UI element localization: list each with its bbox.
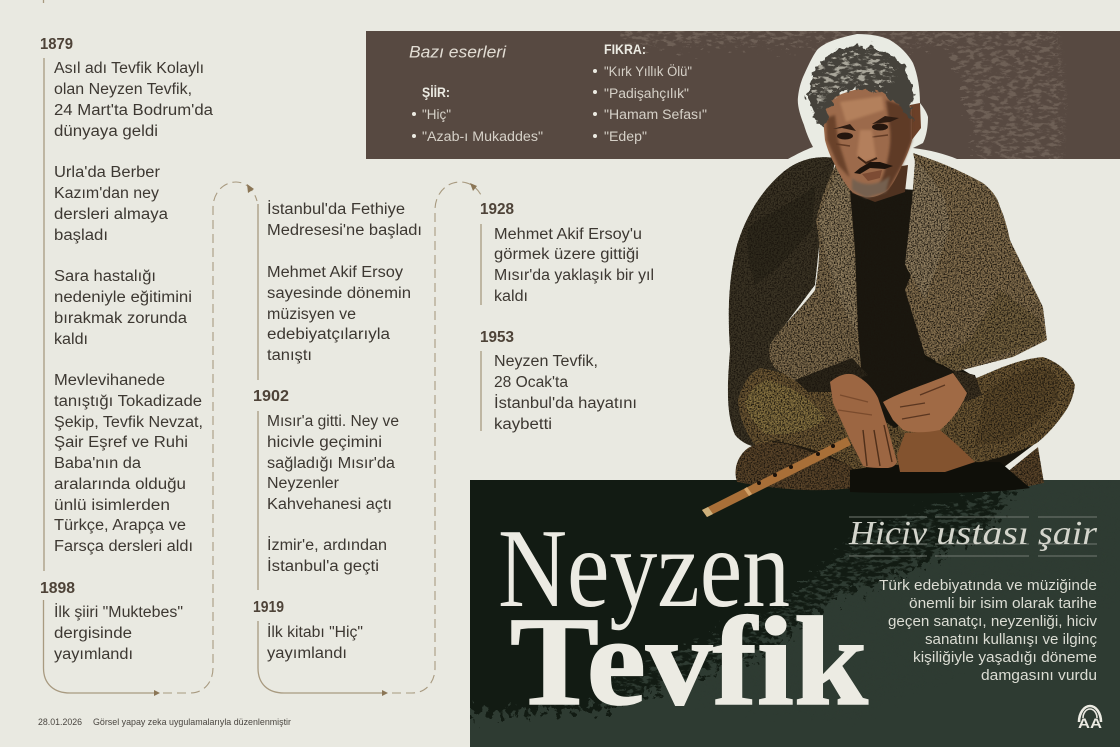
1879 entries: Şair Eşref ve Ruhi bbox=[54, 434, 188, 451]
description text bbox=[879, 578, 1098, 684]
1902 entry: 1902 bbox=[253, 388, 289, 405]
arrow: column 2 to column 3 bbox=[382, 182, 482, 696]
1898 entry bbox=[40, 580, 183, 693]
portrait sticker halo bbox=[788, 34, 957, 159]
subtitle: Hiciv bbox=[848, 515, 928, 552]
timeline column 3 bbox=[480, 201, 654, 433]
1879 entries: olan Neyzen Tevfik, bbox=[54, 81, 192, 98]
1919 entry: İlk kitabı "Hiç" bbox=[267, 623, 363, 641]
1879 entries: 24 Mart'ta Bodrum'da bbox=[54, 102, 213, 119]
face bbox=[822, 87, 912, 197]
1898 entry: İlk şiiri "Muktebes" bbox=[54, 603, 183, 621]
AA logo bbox=[1078, 706, 1102, 731]
1879 entries: Baba'nın da bbox=[54, 455, 141, 472]
anecdote list: "Padişahçılık" bbox=[604, 86, 689, 101]
hair bbox=[808, 46, 913, 128]
footer: date and note: Görsel yapay zeka uygulamalarıyla düzenlenmiştir bbox=[93, 717, 291, 728]
1879 entries: Kazım'dan ney bbox=[54, 185, 159, 202]
1879 entries: Urla'da Berber bbox=[54, 164, 160, 181]
description text: önemli bir isim olarak tarihe bbox=[909, 596, 1097, 612]
poetry list bbox=[412, 85, 543, 144]
1928 entry: 1928 bbox=[480, 201, 514, 218]
1879 entries: Sara hastalığı bbox=[54, 268, 156, 285]
1898 entry: 1898 bbox=[40, 580, 75, 597]
footer: date and note: 28.01.2026 bbox=[38, 717, 82, 728]
1879 entries: ünlü isimlerden bbox=[54, 497, 170, 514]
1953 entry: 28 Ocak'ta bbox=[494, 374, 568, 391]
title panel grunge bbox=[440, 465, 1120, 747]
1898 entry: yayımlandı bbox=[54, 646, 133, 663]
ground shadow bbox=[850, 462, 1030, 493]
top entry arrow bbox=[42, 0, 44, 3]
1879 entries: dünyaya geldi bbox=[54, 123, 158, 140]
face shadow bbox=[876, 100, 912, 192]
works heading: Bazı eserleri bbox=[409, 42, 507, 62]
forehead highlight bbox=[840, 96, 884, 122]
panel: selected works bbox=[366, 31, 1120, 159]
head bbox=[808, 46, 921, 202]
lower lip bbox=[862, 170, 882, 181]
description text: geçen sanatçı, neyzenliği, hiciv bbox=[888, 614, 1098, 630]
jacket right bbox=[905, 153, 1047, 372]
bare shin bbox=[897, 430, 975, 472]
anecdote list: "Edep" bbox=[604, 129, 647, 144]
description text: kişiliğiyle yaşadığı döneme bbox=[913, 650, 1097, 666]
1928 entry: kaldı bbox=[494, 288, 528, 305]
subtitle: ustası bbox=[936, 515, 1029, 552]
moustache bbox=[854, 162, 893, 174]
anecdote list bbox=[593, 42, 707, 144]
AA logo: AA bbox=[1078, 715, 1102, 731]
1879 entries: 1879 bbox=[40, 36, 73, 53]
dark body base bbox=[790, 185, 1040, 490]
1902 entry: hicivle geçimini bbox=[267, 434, 382, 451]
1879 entries: bırakmak zorunda bbox=[54, 310, 187, 327]
1919 entry: 1919 bbox=[253, 599, 284, 616]
1953 entry: Neyzen Tevfik, bbox=[494, 353, 598, 370]
subtitle bbox=[848, 515, 1098, 556]
subtitle: şair bbox=[1038, 515, 1098, 552]
anecdote list: "Kırk Yıllık Ölü" bbox=[604, 64, 692, 79]
1919 entry: yayımlandı bbox=[267, 645, 347, 662]
trousers bbox=[738, 357, 1075, 470]
1928 entry: Mehmet Akif Ersoy'u bbox=[494, 226, 642, 243]
jacket right lapel bbox=[905, 160, 950, 300]
title: Neyzen: Neyzen bbox=[498, 507, 790, 631]
1879 entries: dersleri almaya bbox=[54, 206, 168, 223]
1890s entries: Mehmet Akif Ersoy bbox=[267, 264, 403, 281]
1879 entries: nedeniyle eğitimini bbox=[54, 289, 192, 306]
1890s entries: tanıştı bbox=[267, 347, 312, 364]
1890s entries: sayesinde dönemin bbox=[267, 285, 411, 302]
1902 entry bbox=[253, 388, 399, 590]
1953 entry bbox=[480, 329, 637, 433]
jacket left bbox=[769, 160, 862, 385]
1879 entries: tanıştığı Tokadizade bbox=[54, 393, 202, 410]
1953 entry: kaybetti bbox=[494, 416, 552, 433]
nose bbox=[857, 130, 876, 162]
poetry list: "Hiç" bbox=[422, 107, 451, 122]
1953 entry: İstanbul'da hayatını bbox=[494, 394, 637, 412]
1902 entry: İstanbul'a geçti bbox=[267, 557, 379, 575]
neck bbox=[848, 165, 908, 202]
trouser under shadow bbox=[770, 440, 855, 470]
left cuff bbox=[795, 358, 868, 392]
1879 entries: Türkçe, Arapça ve bbox=[54, 517, 186, 534]
overcoat bbox=[728, 157, 836, 447]
portrait: seated man with ney bbox=[702, 34, 1075, 517]
1902 entry: Neyzenler bbox=[267, 475, 339, 492]
1890s entries: edebiyatçılarıyla bbox=[267, 326, 390, 343]
description text: sanatını kullanışı ve ilginç bbox=[925, 632, 1097, 648]
ear bbox=[908, 103, 921, 145]
1890s entries: müzisyen ve bbox=[267, 306, 356, 323]
1879 entries: Asıl adı Tevfik Kolaylı bbox=[54, 60, 204, 77]
1879 entries: kaldı bbox=[54, 331, 88, 348]
coat collar shadow bbox=[747, 186, 815, 285]
1879 entries: Şekip, Tevfik Nevzat, bbox=[54, 414, 203, 431]
description text: damgasını vurdu bbox=[981, 668, 1097, 684]
hands bbox=[830, 373, 967, 468]
1902 entry: Mısır'a gitti. Ney ve bbox=[267, 413, 399, 430]
ney flute bbox=[702, 437, 851, 517]
panel grunge texture bbox=[610, 31, 1068, 159]
1879 entries: Farsça dersleri aldı bbox=[54, 538, 193, 555]
timeline bbox=[40, 0, 654, 696]
sleeve shadow bbox=[935, 290, 1045, 370]
poetry list: "Azab-ı Mukaddes" bbox=[422, 129, 543, 144]
sweater bbox=[845, 185, 955, 412]
1902 entry: İzmir'e, ardından bbox=[267, 536, 387, 554]
panel: title bbox=[440, 465, 1120, 747]
1953 entry: 1953 bbox=[480, 329, 514, 346]
shoe right bbox=[995, 447, 1044, 488]
1879 entries: başladı bbox=[54, 227, 108, 244]
1902 entry: sağladığı Mısır'da bbox=[267, 455, 395, 472]
title: Tevfik: Tevfik bbox=[510, 592, 868, 732]
1890s entries: İstanbul'da Fethiye bbox=[267, 200, 405, 218]
chin stubble bbox=[852, 176, 890, 198]
textured clothing bbox=[728, 153, 1075, 490]
anecdote list: FIKRA: bbox=[604, 42, 646, 57]
arrow: column 1 to column 2 bbox=[154, 182, 257, 696]
1890s entries: Medresesi'ne başladı bbox=[267, 222, 422, 239]
1898 entry: dergisinde bbox=[54, 625, 132, 642]
1879 entries bbox=[40, 36, 213, 571]
eyes and brows bbox=[833, 116, 899, 146]
shoe left bbox=[735, 442, 858, 490]
1890s entries bbox=[258, 200, 422, 380]
1919 entry bbox=[253, 599, 384, 693]
description text: Türk edebiyatında ve müziğinde bbox=[879, 578, 1097, 594]
1928 entry bbox=[480, 201, 654, 305]
1879 entries: aralarında olduğu bbox=[54, 476, 186, 493]
jacket left lapel highlight bbox=[818, 172, 857, 335]
anecdote list: "Hamam Sefası" bbox=[604, 107, 707, 122]
1902 entry: Kahvehanesi açtı bbox=[267, 496, 392, 513]
timeline column 2 bbox=[253, 200, 422, 693]
right cuff bbox=[953, 370, 982, 402]
1879 entries: Mevlevihanede bbox=[54, 372, 165, 389]
1928 entry: görmek üzere gittiği bbox=[494, 246, 639, 263]
poetry list: ŞİİR: bbox=[422, 85, 450, 100]
hair highlights bbox=[816, 52, 900, 108]
1928 entry: Mısır'da yaklaşık bir yıl bbox=[494, 267, 654, 284]
timeline column 1 bbox=[40, 36, 213, 693]
knee highlight bbox=[745, 380, 825, 434]
